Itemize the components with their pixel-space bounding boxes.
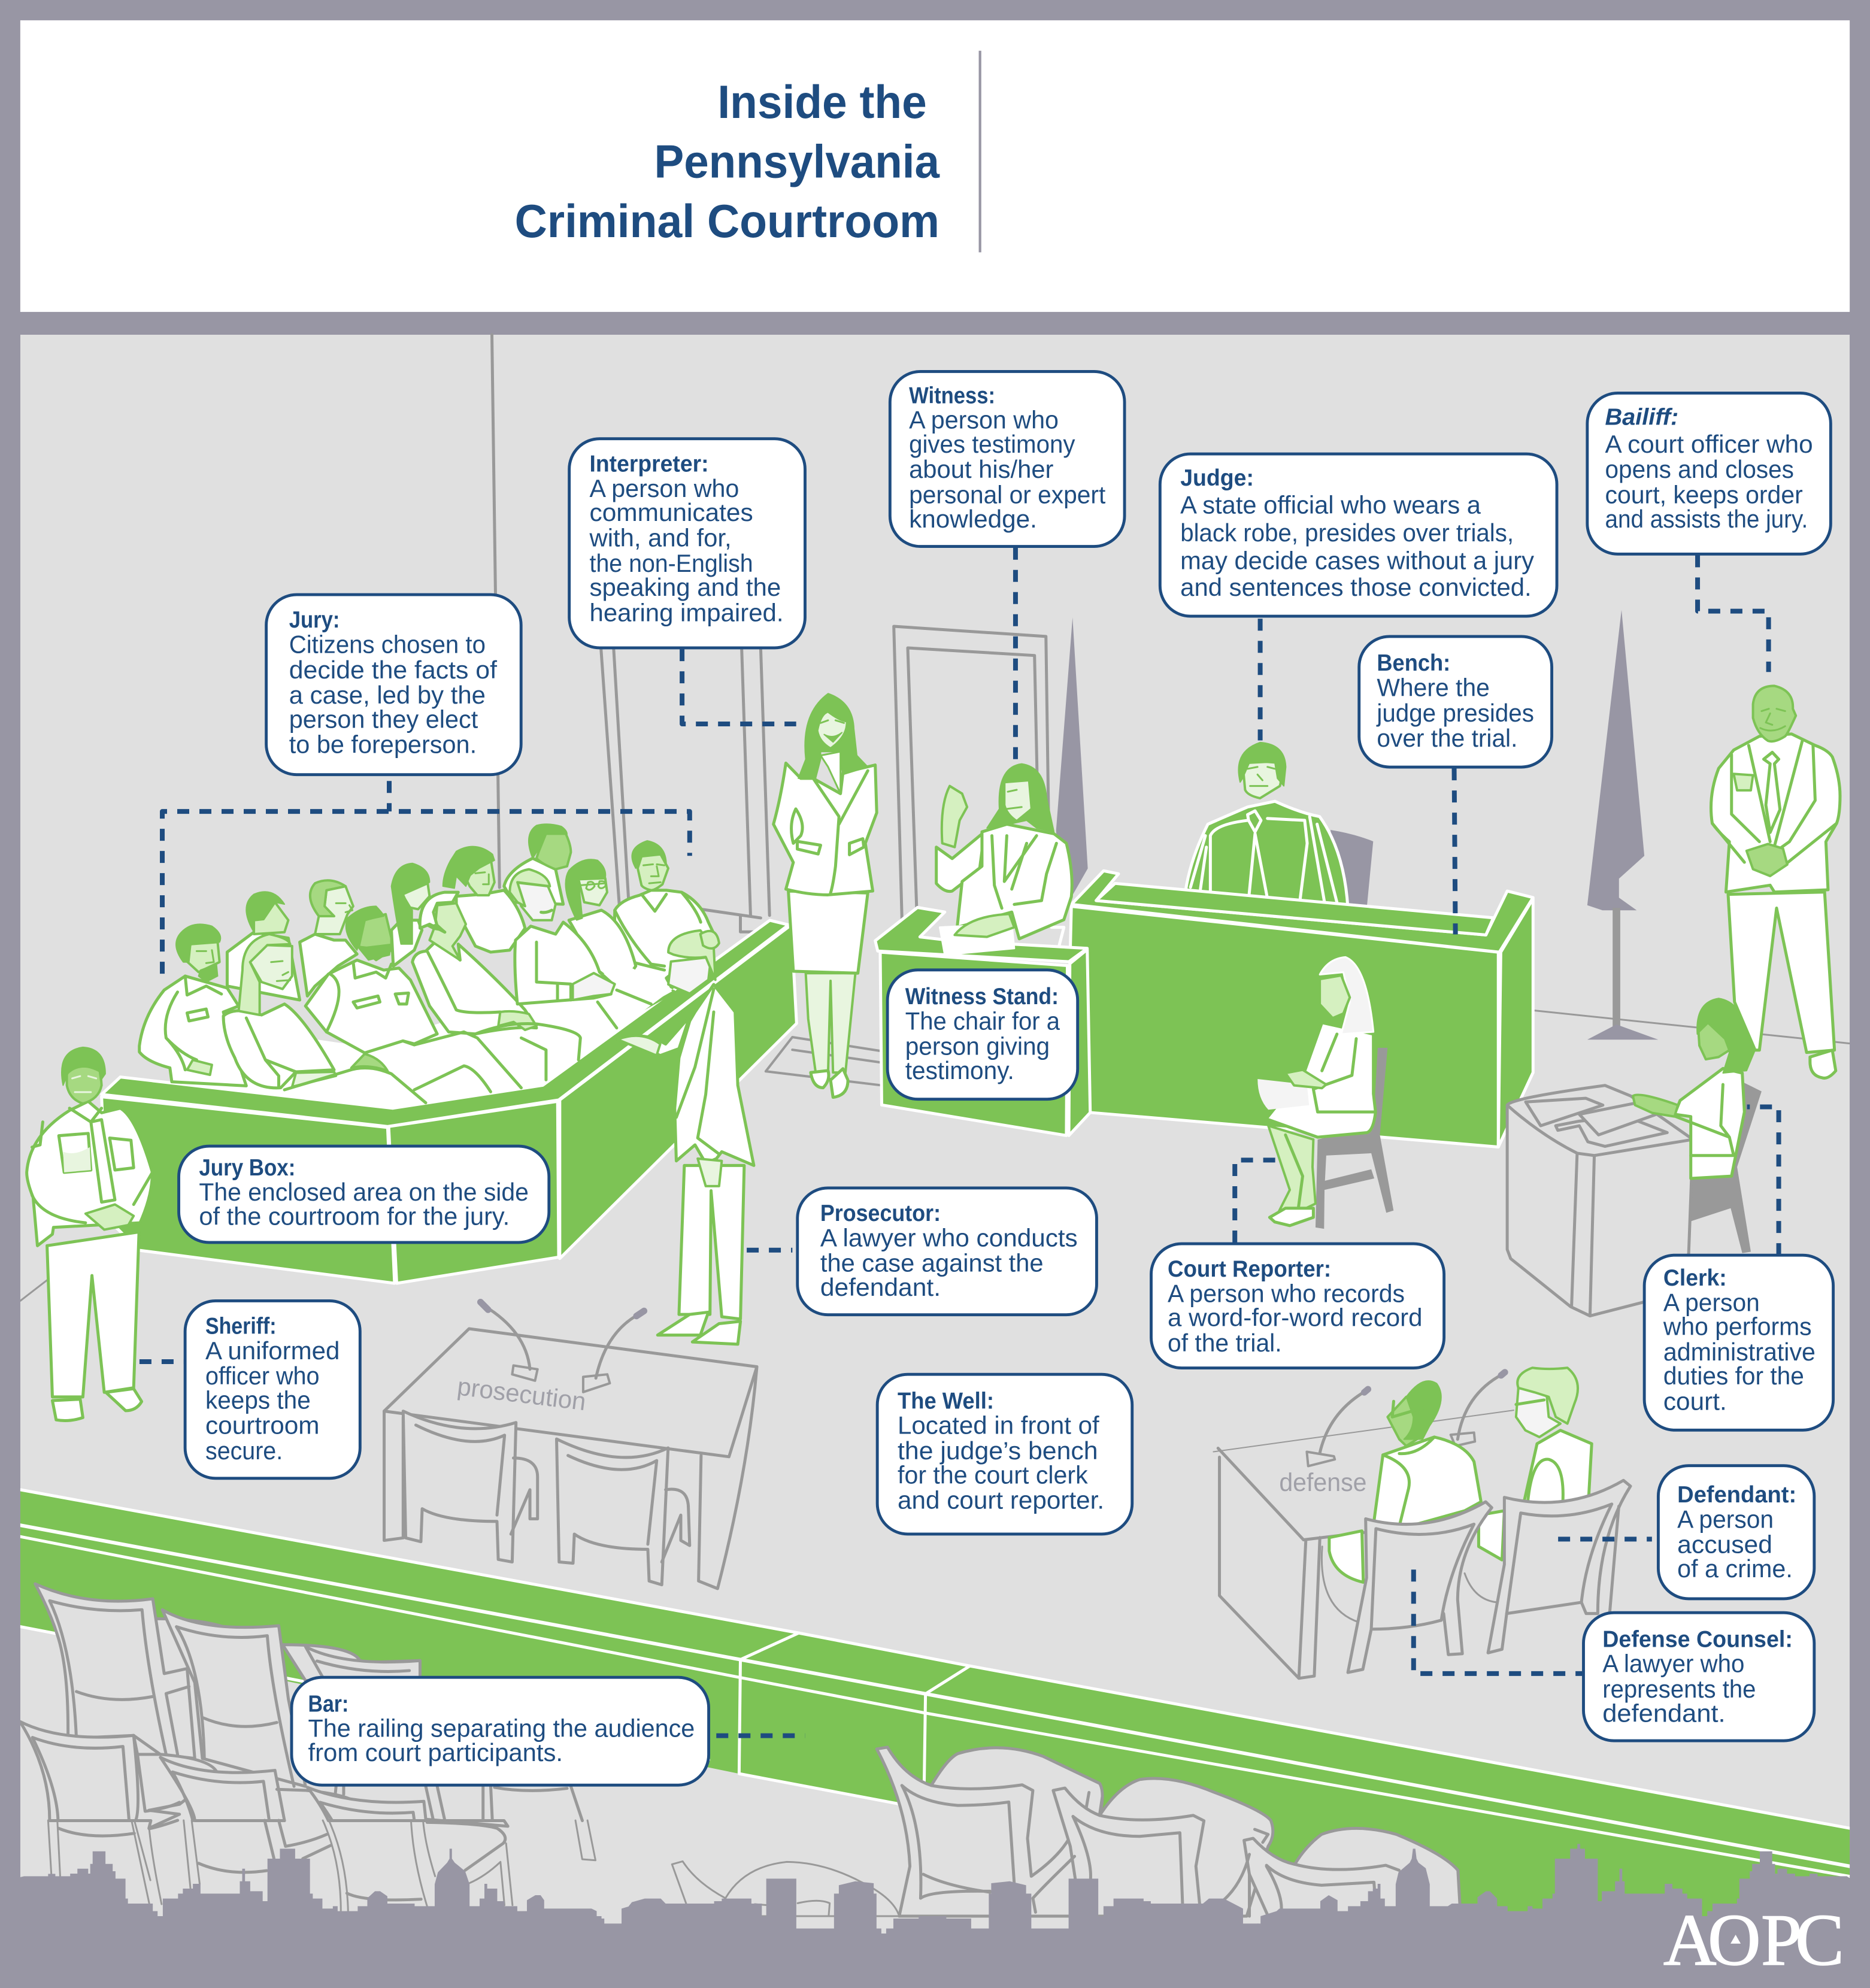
prosecution table: [384, 1302, 757, 1589]
back row chair 2: [162, 1610, 305, 1786]
defense chair 2: [1488, 1480, 1630, 1653]
callout: interpreter: communicates: [590, 499, 753, 526]
callout: defense counsel: represents the: [1602, 1675, 1756, 1703]
callout: judge: black robe, presides over trials,: [1180, 519, 1514, 547]
callout: court reporter: [1151, 1244, 1444, 1368]
callout: the well: Located in front of: [898, 1412, 1099, 1440]
callout: sheriff: secure.: [205, 1437, 283, 1465]
chair R3: [1220, 1828, 1460, 1916]
callout: witness: [890, 371, 1125, 547]
callout: interpreter: the non-English: [590, 550, 753, 577]
callout: the well: and court reporter.: [898, 1487, 1104, 1514]
callout: clerk: Clerk:: [1663, 1265, 1727, 1291]
prosecutor: [617, 931, 754, 1344]
defense table and people: [1213, 1368, 1630, 1678]
callout: judge: A state official who wears a: [1180, 492, 1481, 519]
callout: witness: gives testimony: [909, 431, 1075, 458]
callout: the well: for the court clerk: [898, 1461, 1088, 1489]
callout: jury box: of the courtroom for the jury.: [199, 1202, 510, 1230]
chair R2: [1033, 1778, 1273, 1916]
back row chair 1: [35, 1584, 229, 1759]
callout: bench: over the trial.: [1377, 725, 1517, 752]
callout: the well: the judge’s bench: [898, 1437, 1098, 1465]
juror long hair woman back row: [392, 863, 429, 966]
callout: defendant: accused: [1677, 1531, 1772, 1559]
callout: bench: [1359, 637, 1552, 767]
callout: witness: A person who: [909, 407, 1059, 434]
callout: prosecutor: A lawyer who conducts: [820, 1224, 1078, 1251]
audience chairs left: [20, 1584, 583, 1828]
callout: bench: Where the: [1377, 674, 1490, 701]
chair R1: [877, 1747, 1102, 1916]
callout: bailiff: Bailiff:: [1605, 404, 1678, 430]
callout: judge: and sentences those convicted.: [1180, 574, 1532, 601]
callout: sheriff: A uniformed: [205, 1337, 340, 1365]
callout: interpreter: hearing impaired.: [590, 599, 783, 627]
low back chair: [672, 1861, 899, 1916]
court reporter: [1257, 957, 1393, 1229]
chair 2: [556, 1439, 690, 1585]
callout: bailiff: court, keeps order: [1605, 481, 1803, 509]
callout: defense counsel: defendant.: [1602, 1699, 1726, 1727]
callout: witness: personal or expert: [909, 481, 1106, 509]
front row chair 3: [307, 1787, 508, 1826]
judge: [1186, 743, 1348, 908]
callout: clerk: administrative: [1663, 1338, 1816, 1366]
callout: prosecutor: [798, 1188, 1096, 1315]
callout: witness stand: person giving: [905, 1033, 1050, 1060]
clerk: [1633, 998, 1755, 1178]
callout: bailiff: A court officer who: [1605, 431, 1813, 458]
jurors laps: [172, 954, 720, 1109]
juror long hair woman front: [223, 934, 336, 1088]
dashed connectors: [140, 548, 1779, 1736]
callout: court reporter: a word-for-word record: [1168, 1304, 1423, 1332]
callout: interpreter: [569, 439, 805, 648]
juror light hair woman: [510, 869, 615, 1004]
callout: witness stand: testimony.: [905, 1057, 1014, 1084]
callout: jury: Jury:: [289, 607, 340, 633]
callout: prosecutor: Prosecutor:: [820, 1201, 941, 1226]
callout: bar: from court participants.: [308, 1739, 563, 1766]
clerk desk: [1507, 1086, 1693, 1316]
callout: witness: Witness:: [909, 383, 995, 408]
callout: judge: may decide cases without a jury: [1180, 547, 1534, 575]
defendant figure: [1478, 1368, 1592, 1560]
witness stand: [875, 907, 1090, 1135]
callout: defendant: A person: [1677, 1505, 1774, 1533]
logo: AOPC: AOPC: [1663, 1899, 1844, 1981]
callout: jury box: [179, 1146, 549, 1242]
juror glasses woman: [565, 859, 636, 988]
juror ponytail woman: [443, 847, 525, 952]
bailiff: [1711, 686, 1840, 1078]
clerk desk and clerk: [1507, 998, 1762, 1316]
front row chair 1: [20, 1722, 218, 1828]
far chair: [283, 1645, 583, 1826]
title: Inside the: [717, 75, 927, 128]
city skyline: [0, 1844, 1870, 1988]
defense counsel figure: [1329, 1381, 1481, 1582]
callout: sheriff: [185, 1301, 360, 1478]
callout: witness: knowledge.: [909, 505, 1037, 533]
juror right man: [613, 841, 716, 1026]
callout: bar: The railing separating the audience: [308, 1715, 695, 1742]
callout: jury: a case, led by the: [289, 681, 486, 709]
callout: witness stand: The chair for a: [905, 1007, 1060, 1035]
callout: clerk: duties for the: [1663, 1362, 1804, 1390]
back wall and floor lines: [20, 335, 1850, 1301]
bench and judge: [774, 693, 1533, 1147]
microphone right: [1451, 1372, 1505, 1446]
callout: prosecutor: the case against the: [820, 1250, 1044, 1277]
callout: bar: Bar:: [308, 1691, 348, 1717]
defense table: [1213, 1410, 1514, 1678]
callout: jury box: Jury Box:: [199, 1155, 295, 1181]
callout: bench: Bench:: [1377, 650, 1450, 676]
callout: jury box: The enclosed area on the side: [199, 1178, 529, 1206]
juror leg lines: [284, 990, 651, 1103]
juror light hair man: [300, 880, 357, 996]
title: Criminal Courtroom: [515, 195, 939, 247]
callout: clerk: A person: [1663, 1289, 1760, 1316]
callout: court reporter: of the trial.: [1168, 1329, 1282, 1357]
callout: sheriff: Sheriff:: [205, 1313, 277, 1339]
callout: sheriff: courtroom: [205, 1412, 320, 1440]
audience chair lower frames left: [48, 1820, 596, 1911]
callout: defendant: Defendant:: [1677, 1482, 1796, 1508]
callout: clerk: who performs: [1663, 1313, 1812, 1341]
reporter chair: [1316, 1048, 1393, 1229]
juror bearded dark man: [305, 906, 437, 1053]
front row chair 2: [160, 1757, 357, 1821]
judge chair: [1330, 830, 1373, 908]
microphone 1: [480, 1302, 538, 1381]
callout: bailiff: opens and closes: [1605, 456, 1794, 483]
callout: jury: [266, 595, 521, 775]
juror back dark man: [504, 824, 571, 904]
callout: jury: to be foreperson.: [289, 731, 477, 759]
witness: [936, 764, 1072, 947]
callout: bailiff: [1587, 393, 1830, 554]
callout: sheriff: keeps the: [205, 1386, 311, 1414]
callout: bailiff: and assists the jury.: [1605, 505, 1808, 533]
callout: jury: Citizens chosen to: [289, 631, 486, 658]
callout: judge: [1160, 454, 1557, 616]
callout: the well: [877, 1374, 1132, 1534]
callout: clerk: [1644, 1255, 1833, 1430]
callout: prosecutor: defendant.: [820, 1274, 941, 1301]
callout: interpreter: speaking and the: [590, 574, 781, 601]
microphone 2: [583, 1311, 644, 1392]
label: defense: defense: [1279, 1468, 1366, 1496]
callout: interpreter: Interpreter:: [590, 451, 709, 477]
flag behind witness: [1056, 617, 1088, 913]
callout: bench: judge presides: [1376, 699, 1534, 727]
juror bearded man front: [140, 924, 246, 1086]
witness chair back: [962, 878, 982, 928]
juror leaning man: [413, 892, 537, 1034]
callout: jury: person they elect: [289, 705, 478, 733]
title: [515, 75, 940, 247]
label: prosecution: prosecution: [456, 1372, 587, 1416]
callout: interpreter: A person who: [590, 475, 739, 502]
callout: judge: Judge:: [1180, 465, 1254, 491]
callout: the well: The Well:: [898, 1388, 994, 1414]
callout: defendant: [1658, 1466, 1814, 1599]
callout: clerk: court.: [1663, 1387, 1727, 1415]
callout: defendant: of a crime.: [1677, 1555, 1793, 1583]
flag right of bench: [1587, 610, 1658, 1040]
callout: defense counsel: Defense Counsel:: [1602, 1626, 1793, 1652]
audience chairs right: [672, 1747, 1460, 1916]
callout: defense counsel: [1583, 1613, 1814, 1741]
jurors: [140, 824, 720, 1109]
chair 1: [403, 1411, 538, 1562]
callout: court reporter: A person who records: [1168, 1280, 1405, 1308]
defense chair 1: [1348, 1502, 1492, 1672]
callout: bar: [292, 1677, 709, 1785]
title: Pennsylvania: [654, 135, 940, 187]
callout: witness: about his/her: [909, 456, 1054, 483]
callout: sheriff: officer who: [205, 1362, 320, 1390]
callout: witness stand: [887, 970, 1078, 1099]
interpreter: [774, 693, 877, 1098]
jury box: [102, 920, 796, 1283]
judge bench: [1066, 871, 1533, 1147]
header panel: [20, 20, 1850, 312]
bar railing: [20, 1490, 1850, 1978]
microphone left: [1307, 1389, 1368, 1466]
callout: court reporter: Court Reporter:: [1168, 1256, 1331, 1282]
juror back left man: [227, 892, 300, 1000]
clerk chair: [1684, 1082, 1762, 1253]
callout: interpreter: with, and for,: [589, 525, 732, 552]
sheriff: [27, 1047, 152, 1420]
callout: witness stand: Witness Stand:: [905, 984, 1059, 1010]
callout: jury: decide the facts of: [289, 656, 498, 684]
callout: defense counsel: A lawyer who: [1602, 1650, 1744, 1678]
door behind witness: [894, 626, 1048, 944]
